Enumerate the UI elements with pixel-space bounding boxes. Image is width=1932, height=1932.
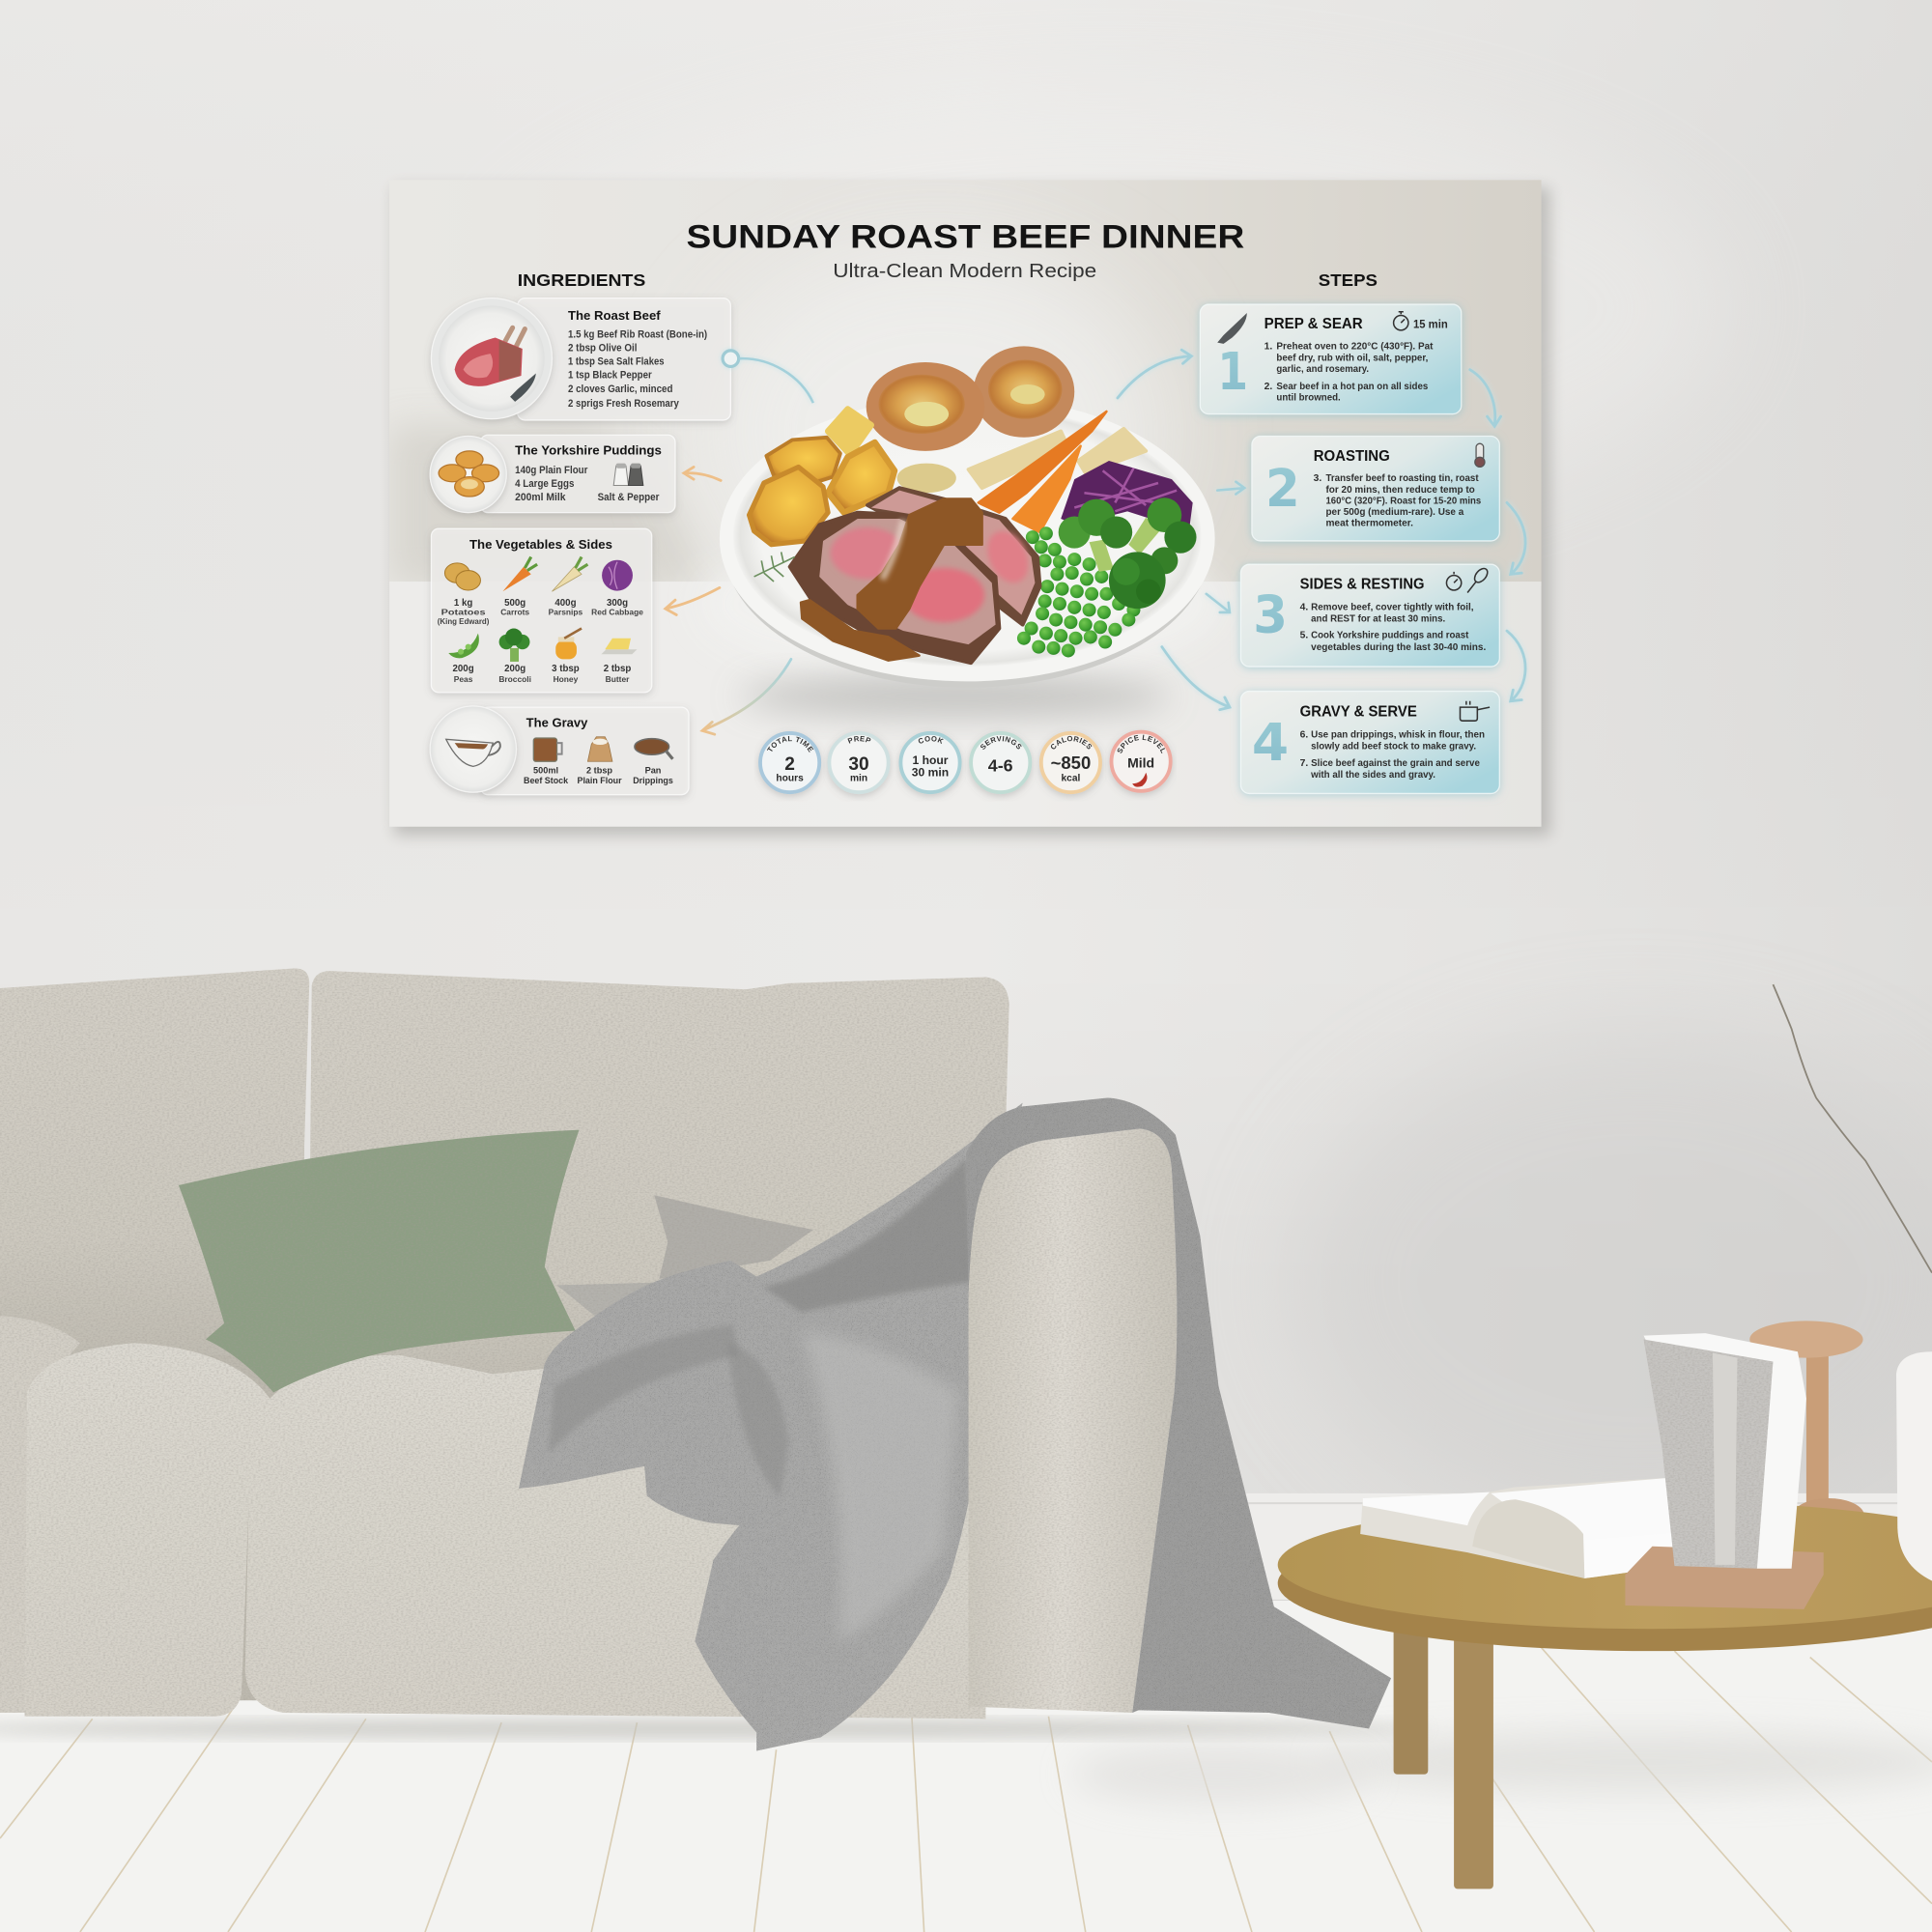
step 4 card: 7. xyxy=(1300,758,1308,769)
panel: the gravy: 2 tbsp xyxy=(586,765,612,775)
panel: the vegetables and sides: The Vegetables & Sides xyxy=(469,537,612,552)
step 1 card: 2. xyxy=(1264,382,1272,392)
panel: the vegetables and sides: (King Edward) xyxy=(438,616,490,626)
panel: the gravy: Pan xyxy=(645,765,662,775)
panel: the gravy: Plain Flour xyxy=(578,776,622,785)
panel: the roast beef: 1.5 kg Beef Rib Roast (Bone-in) xyxy=(568,328,708,340)
step 2 card: 160°C (320°F). Roast for 15-20 mins xyxy=(1325,497,1481,507)
arrow: step 3 to 4 xyxy=(1507,631,1525,701)
poster background xyxy=(389,180,1542,827)
panel: the vegetables and sides: 400g xyxy=(554,598,577,609)
arrow: to gravy xyxy=(702,659,791,734)
panel: the roast beef: 2 sprigs Fresh Rosemary xyxy=(568,398,679,410)
icon: gravy boat xyxy=(446,739,500,766)
stat: servings: SERVINGS xyxy=(980,736,1022,750)
stat: prep: 30 xyxy=(848,754,869,775)
step 1 card: Sear beef in a hot pan on all sides xyxy=(1276,382,1429,392)
step 1 card: until browned. xyxy=(1276,393,1341,404)
stat: total time: hours xyxy=(776,774,804,784)
icon: knife xyxy=(510,373,536,402)
icon: stopwatch xyxy=(1394,312,1408,330)
grey blanket over seat xyxy=(519,1103,1023,1750)
panel: the vegetables and sides: Honey xyxy=(554,674,579,684)
stat: cook xyxy=(900,733,960,792)
heading: steps: STEPS xyxy=(1319,270,1378,290)
sofa seat cushions xyxy=(0,1316,985,1719)
panel: the yorkshire puddings: Salt & Pepper xyxy=(598,492,659,503)
panel: the yorkshire puddings: The Yorkshire Puddings xyxy=(515,443,662,458)
stat: prep: min xyxy=(850,774,867,784)
step 1 card: 15 min xyxy=(1413,317,1448,330)
icon: thermometer xyxy=(1475,443,1485,467)
wooden spool xyxy=(1749,1321,1864,1533)
panel: the vegetables and sides: Parsnips xyxy=(549,607,583,616)
step 3 card xyxy=(1240,564,1499,667)
step 3 card: Remove beef, cover tightly with foil, xyxy=(1311,602,1474,612)
step 2 card: Transfer beef to roasting tin, roast xyxy=(1325,473,1479,484)
step 1 card: 1 xyxy=(1217,341,1248,402)
stat: prep xyxy=(829,733,889,792)
step 2 card: for 20 mins, then reduce temp to xyxy=(1325,485,1475,496)
panel: the yorkshire puddings: 4 Large Eggs xyxy=(515,478,574,490)
icon: pan with drippings xyxy=(635,739,672,759)
stat: servings xyxy=(971,733,1030,792)
roast potatoes xyxy=(750,409,956,545)
step 3 card: 4. xyxy=(1300,602,1308,612)
title: SUNDAY ROAST BEEF DINNER xyxy=(686,218,1244,255)
step 2 card: per 500g (medium-rare). Use a xyxy=(1325,507,1464,518)
step 3 card: Cook Yorkshire puddings and roast xyxy=(1311,631,1469,641)
panel: the vegetables and sides: Peas xyxy=(454,674,473,684)
baseboard xyxy=(1220,1493,1932,1602)
panel: the gravy xyxy=(430,706,689,795)
panel: the vegetables and sides: 500g xyxy=(504,598,526,609)
icon: red cabbage xyxy=(602,560,633,591)
step 1 card: 1. xyxy=(1264,342,1272,353)
panel: the roast beef: 1 tsp Black Pepper xyxy=(568,370,652,382)
icon: salt and pepper xyxy=(613,464,643,486)
icon: saucepan xyxy=(1460,701,1490,721)
step 3 card: 5. xyxy=(1300,631,1308,641)
panel: the vegetables and sides: 200g xyxy=(453,664,474,674)
arrow: plate to step 3 xyxy=(1207,594,1230,612)
icon: peas xyxy=(448,634,479,658)
panel: the vegetables and sides: Butter xyxy=(606,674,630,684)
panel: the vegetables and sides: Potatoes xyxy=(441,607,486,616)
small grey pillows xyxy=(557,1195,813,1323)
stat: spice level xyxy=(1112,732,1171,791)
step 1 card: beef dry, rub with oil, salt, pepper, xyxy=(1276,354,1428,364)
panel: the vegetables and sides: Broccoli xyxy=(498,674,531,684)
panel: the roast beef: 1 tbsp Sea Salt Flakes xyxy=(568,356,665,368)
icon: rib roast xyxy=(455,327,525,386)
step 4 card: 6. xyxy=(1300,730,1308,741)
stats row xyxy=(755,730,1175,800)
step 1 card: PREP & SEAR xyxy=(1264,316,1363,332)
parsnips xyxy=(969,429,1146,488)
red cabbage xyxy=(1061,461,1193,531)
icon: potatoes xyxy=(444,563,480,590)
icon: honey xyxy=(555,629,582,659)
blanket around arm xyxy=(966,1097,1391,1729)
icon: chef knife xyxy=(1217,313,1247,344)
arrow: plate to step 4 xyxy=(1162,647,1230,710)
stat: total time: TOTAL TIME xyxy=(767,736,813,753)
step 4 card: Slice beef against the grain and serve xyxy=(1311,758,1480,769)
stat: spice level: SPICE LEVEL xyxy=(1117,734,1165,753)
arrow: plate to step 1 xyxy=(1118,350,1191,398)
arrow: step 2 to 3 xyxy=(1507,502,1525,574)
step 4 card: 4 xyxy=(1252,712,1289,773)
stat: total time: 2 xyxy=(784,754,795,775)
open book xyxy=(1360,1477,1674,1578)
panel: the yorkshire puddings: 140g Plain Flour xyxy=(515,465,587,476)
step 3 card: vegetables during the last 30-40 mins. xyxy=(1311,642,1486,653)
panel: the yorkshire puddings xyxy=(430,435,675,513)
green throw pillow xyxy=(179,1130,579,1392)
step 2 card: 3. xyxy=(1314,473,1321,484)
floor: white planks xyxy=(0,1601,1932,1932)
icon: parsnip xyxy=(552,557,587,591)
stat: servings: 4-6 xyxy=(988,755,1013,775)
poster: Sunday roast infographic xyxy=(389,180,1542,827)
gravy xyxy=(801,499,982,661)
panel: the roast beef xyxy=(431,298,730,420)
panel: the roast beef: The Roast Beef xyxy=(568,308,661,323)
step 4 card: Use pan drippings, whisk in flour, then xyxy=(1311,730,1485,741)
stat: spice level: Mild xyxy=(1127,755,1154,771)
rosemary sprig xyxy=(754,552,795,582)
step 1 card: garlic, and rosemary. xyxy=(1276,364,1369,375)
step 1 card: Preheat oven to 220°C (430°F). Pat xyxy=(1276,342,1434,353)
yorkshire pudding right xyxy=(974,346,1074,438)
arrow: step 1 to 2 xyxy=(1470,370,1501,426)
icon: flour sack xyxy=(587,737,612,761)
heading: ingredients: INGREDIENTS xyxy=(518,270,645,290)
panel: the gravy: Drippings xyxy=(633,776,673,785)
panel: the vegetables and sides: Red Cabbage xyxy=(591,607,643,616)
panel: the roast beef: 2 tbsp Olive Oil xyxy=(568,343,637,355)
icon: yorkshire puddings xyxy=(439,451,499,497)
step 2 card: 2 xyxy=(1265,458,1300,519)
panel: the vegetables and sides: 300g xyxy=(607,598,628,609)
carrots xyxy=(979,412,1106,532)
stat: prep: PREP xyxy=(847,736,871,744)
step 4 card: GRAVY & SERVE xyxy=(1300,704,1417,721)
stat: calories: CALORIES xyxy=(1051,736,1092,750)
step 4 card: with all the sides and gravy. xyxy=(1310,770,1435,781)
stat: total time xyxy=(760,733,819,792)
sofa arm xyxy=(969,1128,1177,1713)
icon: broccoli xyxy=(499,629,529,662)
stat: cook: 30 min xyxy=(912,766,949,780)
arrow: plate to step 2 xyxy=(1217,482,1244,494)
stat: calories: kcal xyxy=(1062,774,1081,784)
panel: the vegetables and sides: 1 kg xyxy=(454,598,472,609)
beef front slice xyxy=(790,513,999,663)
step 2 card: ROASTING xyxy=(1314,448,1390,465)
yorkshire pudding left xyxy=(867,362,984,451)
plate xyxy=(720,395,1215,688)
panel: the vegetables and sides xyxy=(431,528,652,693)
step 2 card xyxy=(1252,437,1499,541)
arrow: beef to plate xyxy=(723,351,813,403)
broccoli xyxy=(1059,497,1197,609)
panel: the roast beef: 2 cloves Garlic, minced xyxy=(568,384,672,395)
arrow: to vegetables xyxy=(666,587,720,614)
coffee table xyxy=(1278,1501,1932,1889)
step 3 card: and REST for at least 30 mins. xyxy=(1311,613,1445,624)
peas xyxy=(1017,526,1140,657)
branch xyxy=(1773,984,1932,1273)
icons: timer and whisk xyxy=(1446,566,1490,593)
icon: butter xyxy=(601,639,637,654)
panel: the vegetables and sides: 200g xyxy=(504,664,526,674)
white cup xyxy=(1896,1351,1932,1580)
stat: cook: 1 hour xyxy=(913,753,949,767)
arrow: to yorkshire puddings xyxy=(684,467,721,480)
stat: calories: ~850 xyxy=(1051,753,1091,773)
panel: the yorkshire puddings: 200ml Milk xyxy=(515,492,566,503)
sculpture on wooden base xyxy=(1625,1333,1824,1609)
panel: the gravy: The Gravy xyxy=(526,716,588,730)
step 1 card xyxy=(1200,304,1462,414)
poster shadow xyxy=(394,187,1550,836)
sofa back cushions xyxy=(0,968,1010,1700)
step 3 card: SIDES & RESTING xyxy=(1300,577,1424,593)
panel: the gravy: Beef Stock xyxy=(524,776,568,785)
step 4 card xyxy=(1240,692,1499,793)
step 2 card: meat thermometer. xyxy=(1325,519,1413,529)
stat: cook: COOK xyxy=(918,736,944,744)
step 3 card: 3 xyxy=(1253,583,1288,644)
panel: the gravy: 500ml xyxy=(533,765,558,775)
panel: the vegetables and sides: 2 tbsp xyxy=(604,664,631,674)
icon: beef stock jug xyxy=(533,738,562,761)
beef back slice xyxy=(867,488,1040,625)
icon: carrot xyxy=(502,557,537,591)
sofa xyxy=(0,968,1391,1750)
stat: calories xyxy=(1041,733,1100,792)
panel: the vegetables and sides: Carrots xyxy=(500,607,529,616)
panel: the vegetables and sides: 3 tbsp xyxy=(552,664,580,674)
subtitle: Ultra-Clean Modern Recipe xyxy=(833,261,1096,282)
step 4 card: slowly add beef stock to make gravy. xyxy=(1311,742,1476,753)
hero plate of roast dinner xyxy=(720,346,1215,688)
